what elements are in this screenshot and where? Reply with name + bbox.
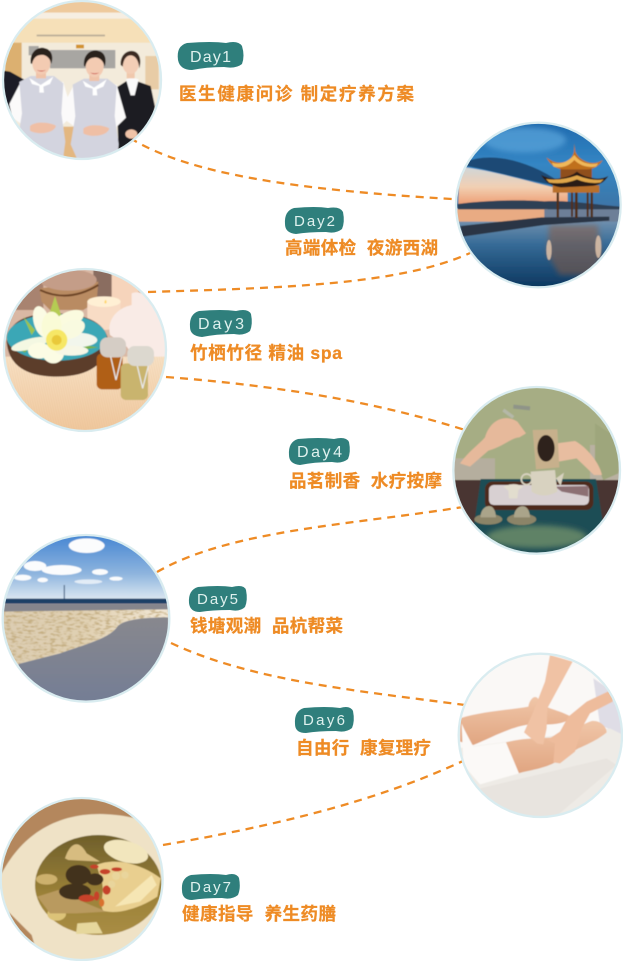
- day 3 text: 竹栖竹径 精油 spa: [190, 343, 342, 363]
- photo circle: West Lake pavilion: [454, 120, 623, 288]
- day 1 text: 医生健康问诊 制定疗养方案: [179, 84, 414, 104]
- dashed route: day 4 to day 5: [157, 507, 463, 572]
- tea leaf scoop: [533, 429, 559, 469]
- morel mushrooms: [59, 865, 103, 900]
- goji berries: [79, 865, 122, 907]
- photo circle: herbal soup: [0, 797, 167, 961]
- day 2 badge: Day2: [294, 213, 335, 230]
- day 6 text: 自由行 康复理疗: [296, 738, 431, 758]
- tablecloth: [474, 478, 603, 552]
- dashed route: day 5 to day 6: [171, 643, 465, 705]
- dashed route: day 6 to day 7: [163, 760, 465, 845]
- day 5 text: 钱塘观潮 品杭帮菜: [190, 616, 343, 636]
- day 6 badge: [295, 707, 354, 733]
- day 6 badge: Day6: [303, 712, 345, 729]
- day 7 text: 健康指导 养生药膳: [182, 904, 336, 924]
- wooden bucket: [39, 269, 98, 310]
- far leg: [460, 697, 571, 745]
- pavilion reflection: [547, 225, 602, 275]
- pavilion: [541, 143, 608, 218]
- pale oil jar: [121, 346, 154, 400]
- towel: [108, 292, 165, 358]
- hands: [460, 418, 526, 467]
- day 3 badge: [190, 310, 252, 337]
- bowl: [7, 313, 108, 377]
- day 2 text: 高端体检 夜游西湖: [285, 238, 438, 258]
- day 4 badge: [289, 438, 350, 465]
- photo circle: medical staff: [0, 0, 163, 163]
- table: [455, 480, 618, 524]
- day 2 badge: [285, 207, 344, 234]
- teapot: [521, 470, 564, 495]
- cups: [474, 506, 536, 525]
- white garment: [462, 723, 519, 784]
- tray: [485, 482, 593, 510]
- dashed route: day 3 to day 4: [166, 377, 465, 430]
- day 5 badge: Day5: [197, 591, 238, 608]
- dashed route: day 1 to day 2: [130, 138, 452, 199]
- day 1 badge: Day1: [190, 49, 231, 66]
- day 7 badge: Day7: [190, 879, 231, 896]
- day 4 text: 品茗制香 水疗按摩: [289, 471, 442, 491]
- dashed route: day 2 to day 3: [148, 253, 470, 292]
- herbs and ingredients: [36, 835, 151, 934]
- photo circle: spa still life: [0, 267, 170, 433]
- amber jar: [97, 337, 126, 389]
- day 7 badge: [182, 874, 240, 900]
- therapist arms and hands: [524, 655, 613, 763]
- soup: [35, 835, 162, 935]
- day 5 badge: [189, 586, 247, 612]
- photo circle: massage therapy: [457, 652, 623, 822]
- day 4 badge: Day4: [297, 444, 342, 461]
- candle: [87, 296, 121, 330]
- chicken: [97, 862, 161, 912]
- tidal bore foam: [0, 609, 168, 664]
- lotus flower: [10, 296, 98, 363]
- teapot lid: [503, 484, 523, 498]
- photo circle: tea ceremony: [450, 383, 623, 557]
- photo circle: Qiantang tide: [0, 533, 173, 707]
- clay pot: [0, 814, 167, 961]
- person on the right in dark suit: [117, 51, 155, 150]
- clouds: [14, 538, 123, 584]
- day 1 badge: [178, 42, 244, 70]
- day 3 badge: Day3: [198, 316, 244, 333]
- pine nuts: [108, 871, 129, 888]
- near leg: [500, 721, 607, 773]
